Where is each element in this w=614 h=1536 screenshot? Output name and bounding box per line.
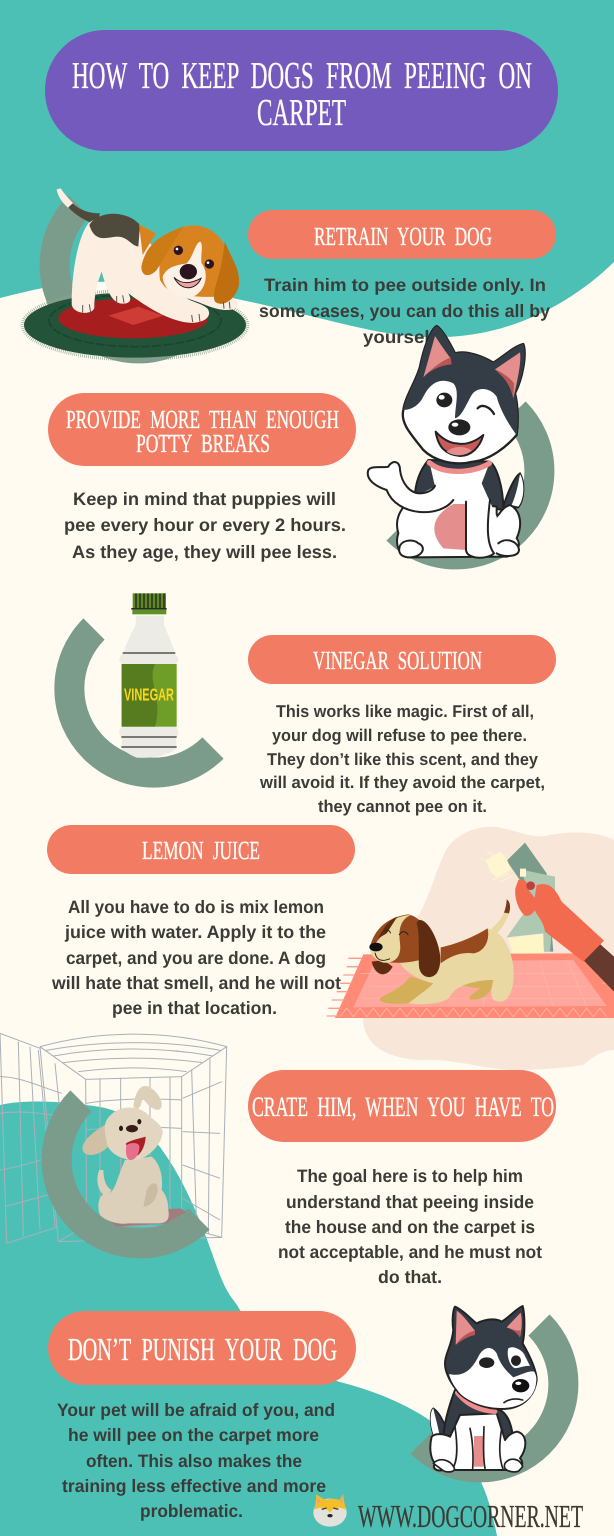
rug — [22, 290, 248, 360]
bottle lines — [121, 653, 177, 747]
text: vinegar: your dog will refuse to pee there. — [272, 726, 527, 745]
text: potty breaks: Keep in mind that puppies will — [73, 489, 336, 509]
text: crate: not acceptable, and he must not — [278, 1242, 542, 1262]
tail — [97, 1170, 112, 1197]
text: don't punish: training less effective and more — [62, 1476, 326, 1496]
ring behind winking husky — [397, 412, 539, 554]
illustration: winking husky — [368, 326, 525, 558]
head — [403, 326, 525, 463]
ring behind sad husky — [421, 1325, 563, 1467]
title banner — [45, 30, 558, 151]
body — [98, 1157, 169, 1224]
paw lines — [83, 295, 230, 322]
text: lemon juice: juice with water. Apply it to the — [64, 922, 326, 942]
head — [105, 1108, 163, 1160]
ear left — [82, 1122, 115, 1155]
heading pill: lemon juice — [47, 825, 355, 874]
text: vinegar: They don’t like this scent, and they — [267, 750, 539, 769]
label text: VINEGAR — [124, 684, 174, 704]
feet — [399, 541, 423, 557]
text: crate: understand that peeing inside — [286, 1192, 534, 1212]
belly — [434, 504, 466, 550]
background: peach blob behind lemon section — [363, 827, 614, 1070]
section: crate him — [248, 1070, 556, 1287]
collar — [429, 463, 489, 471]
label — [122, 664, 177, 727]
arm and sleeve — [582, 944, 614, 992]
text: retrain — [259, 275, 550, 347]
front leg — [466, 500, 494, 558]
ear up — [133, 1086, 162, 1110]
text: lemon juice: All you have to do is mix lemon — [68, 897, 324, 917]
spray bottle back ring — [507, 843, 553, 952]
section: vinegar solution — [248, 635, 556, 816]
text: don't punish: Your pet will be afraid of you, and — [57, 1400, 335, 1420]
section: potty breaks — [48, 393, 356, 562]
heading pill: don't punish — [48, 1311, 356, 1385]
face — [119, 1126, 123, 1131]
text: lemon juice: carpet, and you are done. A dog — [66, 948, 326, 968]
head — [445, 1306, 537, 1409]
heading pill: potty breaks: PROVIDE MORE THAN ENOUGH — [66, 405, 339, 434]
text: don't punish: often. This also makes the — [86, 1451, 302, 1471]
text: don't punish: he will pee on the carpet more — [68, 1425, 319, 1445]
rug — [327, 953, 614, 1018]
text: lemon juice — [51, 897, 341, 1018]
illustration: puppy in crate — [82, 1086, 187, 1227]
heading pill: retrain — [248, 210, 556, 259]
section: retrain your dog — [248, 210, 556, 347]
head — [141, 225, 239, 304]
torso — [443, 1390, 513, 1440]
ring behind beagle — [55, 206, 197, 348]
text: crate: The goal here is to help him — [297, 1166, 523, 1186]
logo: shiba face icon — [313, 1494, 347, 1527]
text: lemon juice: pee in that location. — [112, 998, 277, 1018]
text: potty breaks: As they age, they will pee less. — [72, 542, 337, 562]
illustration: dog on rug with spray bottle — [327, 843, 614, 1018]
section: don't punish — [48, 1311, 356, 1521]
heading pill: vinegar — [248, 635, 556, 684]
tail — [503, 473, 523, 508]
collar — [457, 1393, 495, 1412]
ring behind vinegar bottle — [69, 629, 213, 773]
bottle body — [119, 616, 178, 758]
ring in front of crate — [57, 1101, 199, 1243]
waving arm — [368, 462, 453, 512]
spray splash — [486, 852, 511, 877]
heading pill: crate — [248, 1070, 556, 1142]
title banner: CARPET — [257, 92, 346, 134]
legs — [453, 1427, 503, 1470]
fist — [515, 879, 537, 916]
torso — [415, 460, 503, 510]
heading pill: lemon juice: LEMON JUICE — [142, 836, 260, 865]
illustration: vinegar bottle — [119, 593, 178, 758]
text: crate — [278, 1166, 542, 1287]
background: teal bottom shape — [0, 1101, 497, 1536]
tail — [431, 1408, 446, 1440]
text: potty breaks: pee every hour or every 2 hours. — [64, 515, 346, 535]
spray bottle — [507, 869, 555, 952]
text: potty breaks — [64, 489, 346, 562]
heading pill: potty breaks: POTTY BREAKS — [136, 429, 270, 458]
text: vinegar: will avoid it. If they avoid the carpet, — [259, 773, 545, 792]
section: lemon juice — [47, 825, 355, 1018]
background: teal top shape — [0, 0, 614, 337]
text: vinegar: they cannot pee on it. — [318, 797, 487, 816]
text: vinegar: This works like magic. First of all, — [276, 702, 534, 721]
cap — [133, 593, 166, 608]
heading pill: don't punish: DON’T PUNISH YOUR DOG — [68, 1331, 337, 1367]
tail — [57, 188, 73, 208]
text: don't punish — [57, 1400, 335, 1521]
text: retrain: Train him to pee outside only. In — [264, 275, 546, 295]
heading pill: vinegar: VINEGAR SOLUTION — [313, 646, 482, 675]
text: crate: do that. — [378, 1267, 442, 1287]
heading pill: retrain: RETRAIN YOUR DOG — [314, 222, 492, 251]
dog — [369, 899, 514, 1004]
text: retrain: yourself. — [363, 327, 441, 347]
text: vinegar — [259, 702, 545, 816]
text: lemon juice: will hate that smell, and he will not — [51, 973, 341, 993]
text: retrain: some cases, you can do this all by — [259, 301, 550, 321]
text: don't punish: problematic. — [140, 1501, 243, 1521]
illustration: sad husky — [430, 1306, 537, 1472]
belly — [474, 1436, 483, 1467]
crate mat — [100, 1208, 187, 1227]
saddle — [89, 214, 140, 247]
text: crate: the house and on the carpet is — [285, 1217, 535, 1237]
illustration: wire crate — [0, 1033, 227, 1243]
illustration: beagle on round rug — [22, 188, 248, 360]
body — [72, 216, 238, 323]
heading pill: potty breaks — [48, 393, 356, 466]
